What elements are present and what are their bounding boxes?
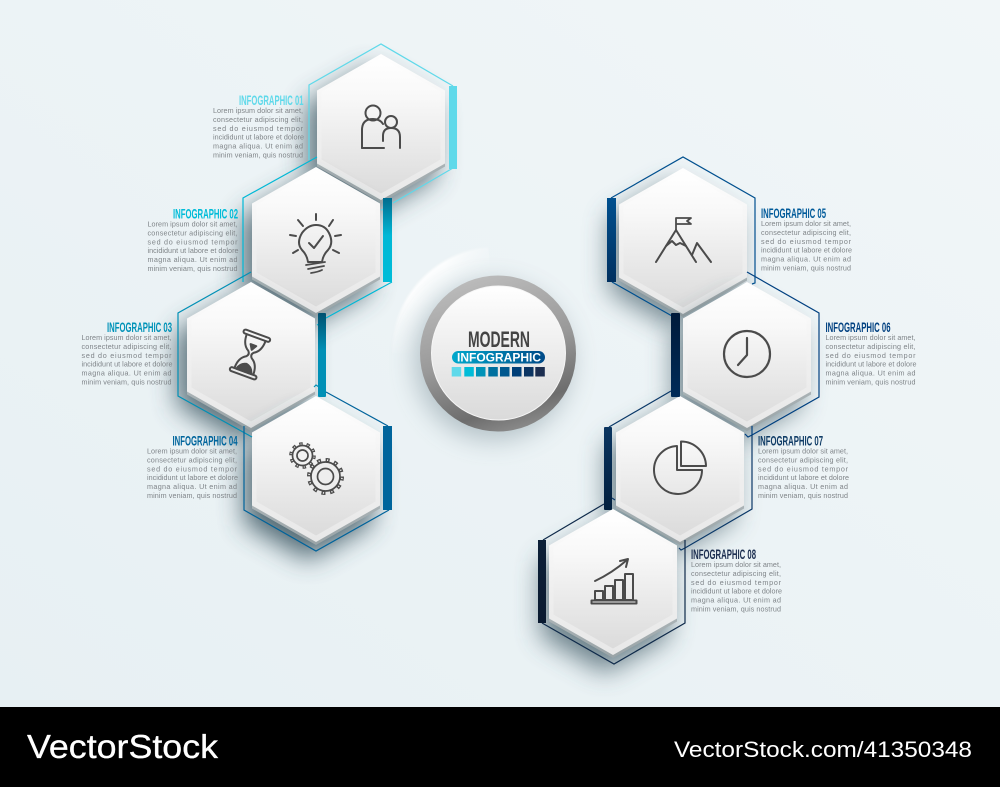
text block: infographic 07: incididunt ut labore et dolore (758, 473, 849, 482)
text block: infographic 06: INFOGRAPHIC 06 (826, 319, 891, 335)
text block: infographic 07: magna aliqua. Ut enim ad (758, 482, 848, 491)
icon: gears (291, 444, 342, 493)
text block: infographic 07: Lorem ipsum dolor sit amet, (758, 446, 848, 455)
text block: infographic 06: Lorem ipsum dolor sit amet, (826, 333, 916, 342)
inner disc (432, 286, 566, 420)
text block: infographic 05: INFOGRAPHIC 05 (761, 205, 826, 221)
text block: infographic 08: incididunt ut labore et dolore (691, 586, 782, 596)
icon: hourglass (229, 329, 271, 380)
icon: people (362, 106, 400, 148)
text block: infographic 04: magna aliqua. Ut enim ad (147, 482, 237, 491)
outline and bar: hexagon 4 (244, 392, 392, 551)
outline and bar: hexagon 1 (309, 44, 457, 210)
text block: infographic 06: minim veniam, quis nostrud (826, 378, 916, 386)
text block: infographic 05 (761, 205, 852, 272)
text block: infographic 01: minim veniam, quis nostrud (213, 150, 303, 160)
text block: infographic 01: sed do eiusmod tempor (213, 124, 304, 133)
footer logo: VectorStock (27, 728, 219, 765)
text block: infographic 08: Lorem ipsum dolor sit amet, (691, 560, 781, 569)
badge pill (452, 351, 545, 364)
text block: infographic 03: consectetur adipiscing elit, (82, 342, 172, 351)
icon: mountain with flag (656, 218, 711, 262)
badge title: MODERN (468, 327, 530, 352)
hexagon 6 (673, 282, 811, 442)
text block: infographic 04: consectetur adipiscing elit, (147, 455, 237, 464)
text block: infographic 04: incididunt ut labore et dolore (147, 473, 238, 482)
text block: infographic 05: minim veniam, quis nostrud (761, 264, 851, 272)
hexagon 1 (307, 54, 445, 214)
icon: growth chart (592, 559, 636, 604)
outline and bar: hexagon 5 (607, 157, 755, 316)
text block: infographic 01: consectetur adipiscing elit, (213, 115, 303, 124)
outline and bar: hexagon 8 (538, 504, 685, 664)
text block: infographic 07: INFOGRAPHIC 07 (758, 432, 823, 448)
icon: clock (724, 331, 770, 377)
text block: infographic 03 (82, 319, 172, 386)
text block: infographic 04: Lorem ipsum dolor sit amet, (147, 446, 237, 455)
text block: infographic 03: INFOGRAPHIC 03 (107, 319, 172, 335)
text block: infographic 01: INFOGRAPHIC 01 (239, 92, 304, 108)
text block: infographic 07: sed do eiusmod tempor (758, 464, 849, 473)
text block: infographic 02: Lorem ipsum dolor sit amet, (148, 219, 238, 228)
text block: infographic 05: Lorem ipsum dolor sit amet, (761, 219, 851, 228)
text block: infographic 04 (147, 432, 238, 500)
glow arc (397, 252, 470, 326)
text block: infographic 06 (826, 319, 916, 386)
text block: infographic 08 (691, 546, 782, 614)
color swatches (452, 367, 545, 376)
footer url: VectorStock.com/41350348 (674, 737, 972, 762)
text block: infographic 05: magna aliqua. Ut enim ad (761, 254, 851, 264)
hexagon 5 (609, 168, 747, 328)
text block: infographic 06: incididunt ut labore et dolore (826, 360, 916, 368)
footer bar (0, 707, 1000, 787)
text block: infographic 03: incididunt ut labore et dolore (82, 360, 172, 368)
text block: infographic 07: consectetur adipiscing elit, (758, 455, 848, 464)
text block: infographic 02: consectetur adipiscing elit, (148, 228, 238, 237)
text block: infographic 07 (758, 432, 849, 500)
text block: infographic 08: magna aliqua. Ut enim ad (691, 596, 781, 604)
hexagon 2 (242, 167, 380, 327)
outline and bar: hexagon 2 (243, 157, 392, 325)
text block: infographic 07: minim veniam, quis nostrud (758, 491, 848, 500)
outline and bar: hexagon 7 (604, 391, 752, 550)
text block: infographic 03: sed do eiusmod tempor (82, 351, 172, 360)
text block: infographic 04: sed do eiusmod tempor (147, 464, 238, 473)
text block: infographic 08: INFOGRAPHIC 08 (691, 546, 756, 562)
text block: infographic 05: consectetur adipiscing elit, (761, 228, 851, 237)
outline and bar: hexagon 3 (178, 272, 326, 437)
text block: infographic 04: INFOGRAPHIC 04 (172, 432, 238, 448)
icon: pie chart (654, 442, 706, 494)
text block: infographic 02: magna aliqua. Ut enim ad (148, 255, 238, 264)
text block: infographic 03: minim veniam, quis nostrud (82, 378, 172, 386)
text block: infographic 06: consectetur adipiscing elit, (826, 342, 916, 351)
outer ring (420, 276, 576, 432)
text block: infographic 02 (148, 206, 238, 273)
text block: infographic 06: magna aliqua. Ut enim ad (826, 368, 916, 378)
text block: infographic 02: sed do eiusmod tempor (148, 237, 238, 246)
text block: infographic 01: incididunt ut labore et dolore (213, 132, 304, 142)
center badge (388, 243, 576, 440)
text block: infographic 01 (213, 92, 304, 160)
hexagon 3 (177, 282, 315, 442)
text block: infographic 01: magna aliqua. Ut enim ad (213, 142, 303, 150)
text block: infographic 05: sed do eiusmod tempor (761, 237, 852, 246)
text block: infographic 08: consectetur adipiscing elit, (691, 569, 781, 578)
icon: light bulb (290, 214, 341, 273)
badge shadow (415, 284, 571, 440)
text block: infographic 05: incididunt ut labore et dolore (761, 246, 852, 254)
text block: infographic 03: magna aliqua. Ut enim ad (82, 368, 172, 378)
hexagon 4 (244, 396, 380, 560)
text block: infographic 03: Lorem ipsum dolor sit amet, (82, 333, 172, 342)
text block: infographic 08: minim veniam, quis nostrud (691, 604, 781, 614)
text block: infographic 08: sed do eiusmod tempor (691, 578, 782, 587)
text block: infographic 02: minim veniam, quis nostrud (148, 264, 238, 273)
text block: infographic 01: Lorem ipsum dolor sit amet, (213, 106, 303, 115)
text block: infographic 02: INFOGRAPHIC 02 (173, 206, 238, 222)
text block: infographic 06: sed do eiusmod tempor (826, 351, 916, 360)
badge subtitle: INFOGRAPHIC (457, 352, 541, 364)
outline and bar: hexagon 6 (671, 272, 819, 437)
hexagon 8 (541, 509, 677, 673)
text block: infographic 04: minim veniam, quis nostrud (147, 491, 237, 500)
hexagon 7 (606, 396, 744, 556)
text block: infographic 02: incididunt ut labore et dolore (148, 246, 238, 255)
